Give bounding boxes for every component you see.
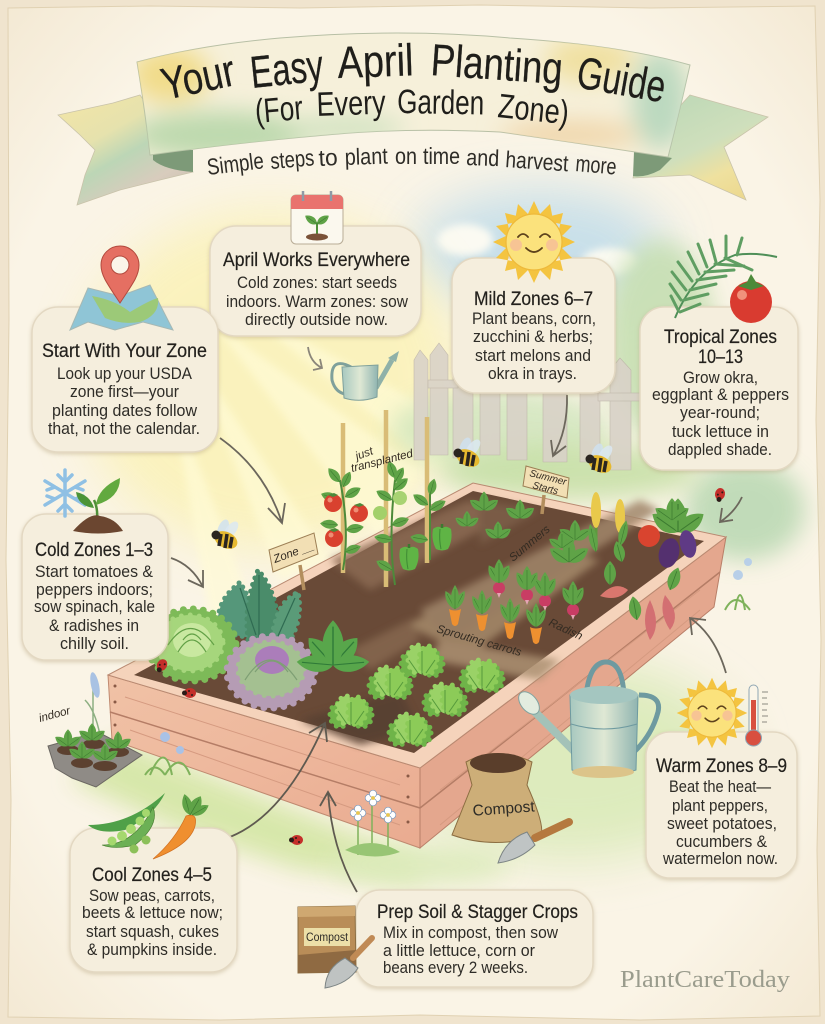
panel: Cold Zones: Start tomatoes & [35,562,154,581]
arrow: april panel [308,347,322,370]
crop: carrots [442,585,549,644]
icon: sun and thermometer [677,678,768,748]
compost bag [452,753,542,842]
sign: Zone [269,533,318,590]
picket fence [414,343,640,470]
subtitle: to [318,144,338,171]
panel: Mild Zones: Mild Zones 6–7 [474,289,593,310]
panel: Cold Zones: sow spinach, kale [34,597,155,616]
icon: calendar [291,191,343,244]
flowers and grass tufts [145,558,752,857]
crop: lettuce heads and cabbage [148,570,370,708]
subtitle [205,142,618,180]
panel: Cool Zones: Cool Zones 4–5 [92,865,212,886]
panel: April Works Everywhere: indoors. Warm zones: sow [226,292,409,311]
subtitle: plant [344,142,389,170]
title line 1: Your [156,45,239,110]
bed: soil [134,491,704,753]
panel: Cool Zones: Sow peas, carrots, [89,886,215,905]
crop: corn and beans [546,492,630,567]
title line 2 [253,83,571,132]
icon: snowflake and sprout [45,470,123,534]
panel: Tropical Zones: tuck lettuce in [672,422,769,441]
panel: Cold Zones: peppers indoors; [36,580,153,599]
crop: radishes [485,559,587,620]
banner: right tail [633,95,768,200]
panel: Prep Soil [356,890,593,987]
panel: Warm Zones: plant peppers, [672,796,768,815]
bed handwritten notes: just [352,445,376,464]
subtitle: on [395,143,417,169]
arrow: cool zones [230,723,327,837]
seedling tray and lavender [38,671,142,787]
arrow: prep soil [320,792,357,892]
bed: rim [108,483,726,768]
panel: Start With Your Zone: zone first—your [70,382,179,401]
watering can [515,662,659,778]
subtitle: and [466,144,500,171]
panel: Tropical Zones: Tropical Zones [664,327,777,348]
bed handwritten notes: transplanted [350,448,415,475]
panel: Warm Zones: sweet potatoes, [667,814,777,833]
sign: Summer Starts [523,466,569,514]
panel: Prep Soil: a little lettuce, corn or [383,941,535,960]
icon: pea pod and carrot [88,793,211,859]
panel: Warm Zones [646,732,797,878]
icon: small watering can [332,351,399,400]
panel: Prep Soil: beans every 2 weeks. [383,958,528,977]
panel: Start With Your Zone [32,307,218,452]
panel: Cool Zones [70,828,237,972]
title line 1: Easy [248,40,326,98]
panel: April Works Everywhere [210,226,421,336]
icon: compost bag and trowel [298,906,372,988]
panel: Tropical Zones: 10–13 [698,347,743,368]
banner: main ribbon [130,33,690,159]
panel: Cool Zones: start squash, cukes [86,922,219,941]
panel: Tropical Zones: Grow okra, [683,368,758,387]
panel: Warm Zones: Beat the heat— [669,777,771,796]
sign: Summer Starts: Starts [531,480,559,497]
bed handwritten notes: Radish [547,617,584,643]
panel: Mild Zones: zucchini & herbs; [473,327,593,346]
subtitle: Simple [205,147,265,180]
panel: Mild Zones: okra in trays. [488,364,577,383]
banner: folds [153,150,672,176]
arrow: warm zones [690,618,726,673]
icon: map and location pin [70,246,173,330]
icon: smiling sun [493,201,575,283]
subtitle: steps [269,144,315,174]
panel: Start With Your Zone: Start With Your Zone [42,341,207,362]
raised garden bed [108,410,726,848]
sign: Zone: Zone __ [271,540,316,566]
title banner [58,33,768,205]
panel: Cold Zones: chilly soil. [60,634,129,653]
panel: Mild Zones: start melons and [475,346,591,365]
arrow: cold zones [171,558,203,587]
title line 1: April [337,34,414,88]
panel: Mild Zones: Plant beans, corn, [472,309,596,328]
panel: Mild Zones [452,258,615,393]
panel: Start With Your Zone: that, not the calendar. [48,419,200,438]
crop: lettuce seedlings [330,645,503,745]
panel: April Works Everywhere: Cold zones: start seeds [237,273,397,292]
panel: Cool Zones: beets & lettuce now; [82,903,223,922]
title line 2: (For [253,89,305,131]
crop: eggplant and tomato [638,498,708,570]
subtitle: time [423,143,460,169]
compost bag: Compost [472,798,536,820]
icon: compost bag and trowel: Compost [306,930,349,944]
bed: right face [420,537,726,848]
panel: April Works Everywhere: directly outside now. [245,310,388,329]
panel: Cold Zones: Cold Zones 1–3 [35,540,153,561]
panel: Tropical Zones: year-round; [680,403,760,422]
bees [212,436,615,552]
panel: Warm Zones: watermelon now. [662,849,778,868]
crop: back-row seedlings [453,492,537,541]
ladybugs [154,487,726,845]
panel: Cool Zones: & pumpkins inside. [87,940,217,959]
sign: Summer Starts: Summer [528,468,568,488]
arrow: tropical zones [720,497,742,522]
panel: Start With Your Zone: Look up your USDA [57,364,193,383]
title line 1 [156,34,670,112]
seedling tray and lavender: indoor [38,705,73,725]
banner: left tail [58,95,193,205]
panel: Cold Zones [22,514,168,660]
scene washes: sky, sunlight and grass [70,190,805,885]
bed handwritten notes [350,445,584,659]
panel: Warm Zones: cucumbers & [676,832,768,851]
panel: Tropical Zones [640,307,798,470]
panel: Tropical Zones: dappled shade. [668,440,772,459]
logo: PlantCareToday: PlantCareToday [620,967,790,993]
panel: April Works Everywhere: April Works Everywhere [223,250,410,271]
title line 1: Guide [573,47,670,112]
panel: Tropical Zones: eggplant & peppers [652,385,789,404]
panel: Prep Soil: Prep Soil & Stagger Crops [377,902,578,923]
bed handwritten notes: Summers [507,523,553,564]
bed handwritten notes: Sprouting carrots [435,623,523,659]
title line 2: Garden [397,83,485,123]
arrow: zone to bed [220,438,285,523]
panel: Warm Zones: Warm Zones 8–9 [656,756,787,777]
garden trowel [498,822,569,863]
panel: Prep Soil: Mix in compost, then sow [383,923,559,942]
subtitle: more [575,150,618,180]
crop: staked tomato and pepper plants [320,410,452,587]
title line 1: Planting [429,34,565,94]
panel: Cold Zones: & radishes in [49,616,139,635]
panel: Start With Your Zone: planting dates follow [52,401,198,420]
icon: palm frond and tomato [670,236,777,323]
title line 2: Every [316,84,386,124]
title line 2: Zone) [496,87,571,132]
crop: sweet potatoes [600,540,684,640]
subtitle: harvest [505,146,570,176]
arrow: mild zones [551,395,567,456]
bed: left face [108,675,420,848]
